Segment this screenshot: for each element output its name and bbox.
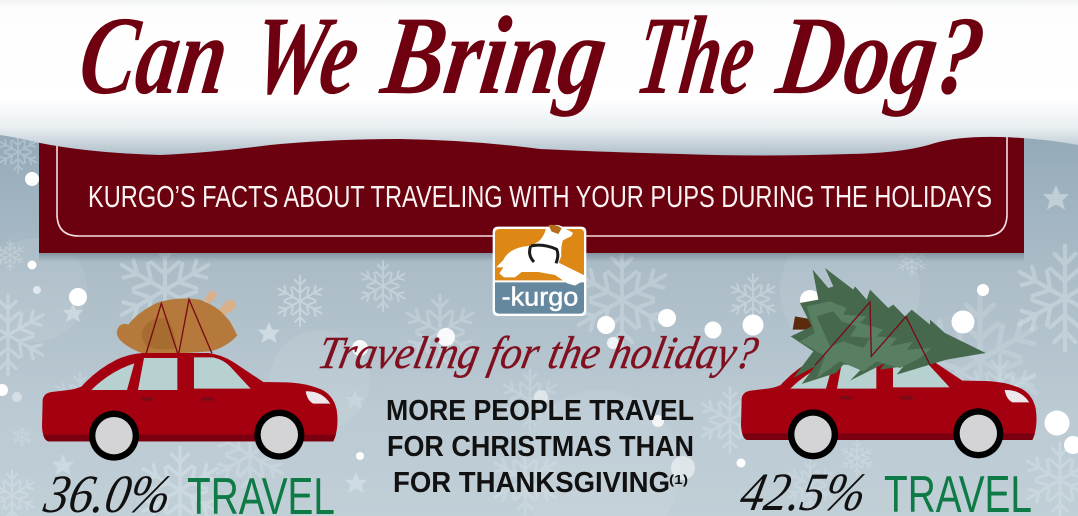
car	[42, 353, 338, 461]
left car with turkey	[42, 291, 338, 461]
logo frame	[493, 227, 586, 316]
icon: harness	[530, 245, 558, 263]
title	[73, 0, 992, 118]
logo orange panel	[495, 229, 584, 280]
banner shadow	[39, 253, 1024, 262]
central statement: FOR THANKSGIVING	[393, 467, 670, 499]
icon: christmas tree	[791, 268, 986, 384]
icon: dog	[496, 225, 584, 286]
central statement: FOR CHRISTMAS THAN	[387, 431, 694, 463]
central statement: (1)	[669, 472, 688, 487]
snow header	[0, 0, 1078, 156]
logo wordmark: -kurgo	[502, 281, 578, 311]
logo blue panel	[495, 282, 584, 314]
snowflake and bokeh pattern	[0, 131, 1078, 516]
kurgo logo	[493, 225, 586, 316]
icon: turkey	[117, 291, 237, 355]
banner panel	[39, 125, 1024, 253]
subheading: Traveling for the holiday?	[314, 328, 762, 379]
central statement	[386, 395, 694, 499]
car	[741, 352, 1037, 459]
right car with tree	[741, 268, 1037, 459]
right statistic	[735, 462, 1032, 516]
banner	[39, 125, 1024, 262]
left statistic	[39, 464, 335, 516]
central statement: MORE PEOPLE TRAVEL	[386, 395, 694, 427]
banner outline	[57, 130, 1007, 236]
